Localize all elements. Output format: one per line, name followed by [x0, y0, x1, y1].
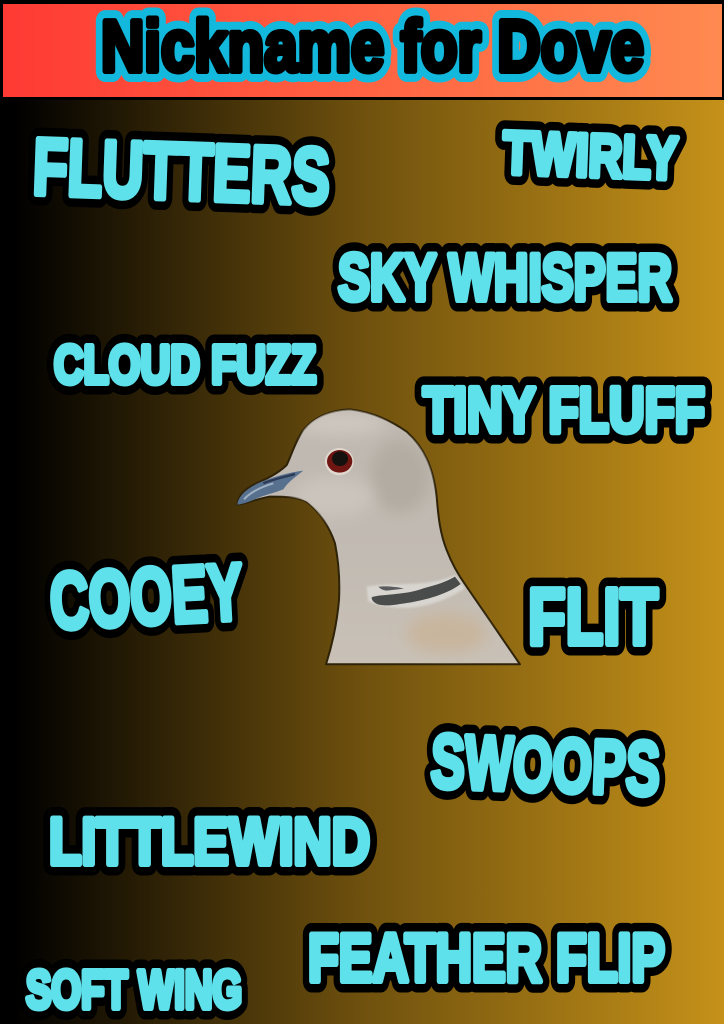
- cheek shading: [370, 440, 430, 513]
- cheek light: [293, 477, 373, 517]
- label: Cooey: [48, 547, 245, 646]
- label: Cloud Fuzz: CLOUD FUZZ: [54, 335, 316, 395]
- neck collar: [372, 577, 461, 605]
- beak highlight: [244, 483, 273, 499]
- label: Littlewind: LITTLEWIND: [49, 804, 370, 878]
- label: Flutters: [31, 122, 331, 221]
- label: Twirly: TWIRLY: [502, 119, 679, 192]
- eye ring: [325, 448, 354, 475]
- label: Littlewind: LITTLEWIND: [49, 804, 370, 878]
- beak: [237, 471, 303, 505]
- label: Cloud Fuzz: CLOUD FUZZ: [54, 335, 316, 395]
- eye iris: [327, 450, 352, 473]
- breast tint: [407, 613, 487, 653]
- crown highlight: [293, 412, 387, 435]
- label: Flutters: FLUTTERS: [31, 122, 331, 221]
- collar white edge: [367, 575, 465, 608]
- label: Cooey: COOEY: [48, 547, 245, 646]
- beak dark marks: [263, 474, 295, 483]
- label: Cooey: COOEY: [48, 547, 245, 646]
- label: Flit: FLIT: [528, 572, 658, 661]
- illustration: dove head: [237, 409, 520, 664]
- collar upper fleck: [378, 586, 404, 591]
- soft plumage shading: [293, 412, 487, 653]
- label: Flit: FLIT: [528, 572, 658, 661]
- panel: title banner: [3, 4, 722, 97]
- banner background: [3, 4, 722, 97]
- label: Flutters: FLUTTERS: [31, 122, 331, 221]
- label: Twirly: TWIRLY: [502, 119, 679, 192]
- label: Soft Wing: SOFT WING: [26, 960, 242, 1020]
- dove silhouette: [237, 409, 520, 664]
- eye pupil: [332, 451, 348, 466]
- label: Soft Wing: SOFT WING: [26, 960, 242, 1020]
